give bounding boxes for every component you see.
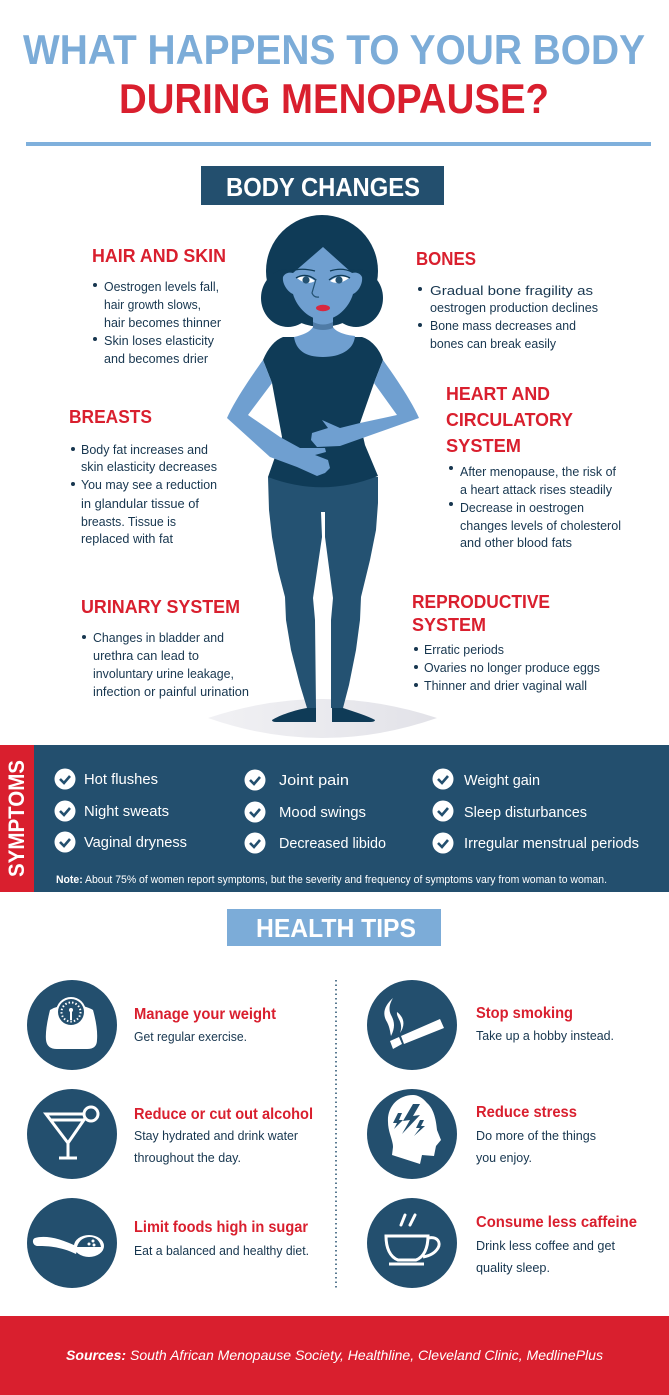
panel: hair and skin: and becomes drier	[104, 351, 209, 366]
legs	[268, 477, 378, 708]
panel: heart and circulatory system: Decrease in oestrogen	[460, 500, 584, 515]
tip: reduce stress: Do more of the things	[476, 1129, 596, 1143]
tip: manage your weight: Manage your weight	[134, 1006, 276, 1023]
panel: urinary system: Changes in bladder and	[93, 630, 224, 645]
tip: limit sugar	[27, 1198, 309, 1288]
panel: reproductive system	[412, 592, 600, 693]
mouth	[316, 305, 330, 311]
heading: health tips	[227, 909, 441, 946]
panel: urinary system	[81, 597, 249, 699]
panel: reproductive system: REPRODUCTIVE	[412, 592, 550, 612]
panel: urinary system: infection or painful urination	[93, 684, 249, 699]
icon: head with lightning	[367, 1089, 457, 1179]
panel: reproductive system: Thinner and drier vaginal wall	[424, 678, 587, 693]
title: DURING MENOPAUSE?	[119, 75, 549, 122]
icon: scale	[27, 980, 117, 1070]
face	[283, 247, 362, 320]
panel: breasts: You may see a reduction	[81, 477, 217, 492]
panel: breasts: breasts. Tissue is	[81, 514, 176, 529]
panel: hair and skin: hair growth slows,	[104, 297, 201, 312]
panel: urinary system: urethra can lead to	[93, 648, 199, 663]
hair	[261, 215, 383, 327]
symptom list	[84, 771, 639, 852]
icon: cigarette	[367, 980, 457, 1070]
panel: heart and circulatory system: changes levels of cholesterol	[460, 518, 621, 533]
shirt	[263, 337, 383, 487]
symptoms label: SYMPTOMS	[4, 760, 29, 877]
left arm	[227, 360, 330, 476]
panel: hair and skin	[92, 246, 226, 366]
tip: manage your weight	[27, 980, 276, 1070]
panel: bones: Gradual bone fragility as	[430, 283, 594, 298]
tip: reduce alcohol: Stay hydrated and drink water	[134, 1129, 298, 1143]
symptom list: Joint pain	[279, 772, 349, 789]
heading: body changes: BODY CHANGES	[226, 172, 420, 202]
panel: reproductive system: Erratic periods	[424, 642, 504, 657]
panel: breasts	[69, 407, 217, 546]
symptom list: Weight gain	[464, 772, 540, 789]
title	[23, 26, 645, 122]
icon: martini glass	[27, 1089, 117, 1179]
icon: coffee cup	[367, 1198, 457, 1288]
tip: less caffeine	[367, 1198, 637, 1288]
eyes	[289, 269, 352, 297]
panel: reproductive system: SYSTEM	[412, 615, 486, 635]
panel: symptoms	[0, 745, 669, 892]
tip: less caffeine: quality sleep.	[476, 1261, 550, 1275]
panel: heart and circulatory system: CIRCULATORY	[446, 410, 573, 430]
tip: reduce stress	[367, 1089, 596, 1179]
panel: hair and skin: Skin loses elasticity	[104, 333, 214, 348]
heading: body changes	[201, 166, 444, 205]
floor shadow	[208, 699, 437, 738]
panel: urinary system: URINARY SYSTEM	[81, 597, 240, 617]
panel: heart and circulatory system: HEART AND	[446, 384, 550, 404]
panel: breasts: in glandular tissue of	[81, 496, 199, 511]
figure: woman	[208, 215, 437, 738]
symptom list: Hot flushes	[84, 771, 158, 788]
panel: breasts: skin elasticity decreases	[81, 459, 217, 474]
note: Note: About 75% of women report symptoms, but the severity and frequency of symptoms vary from woman to woman.	[56, 874, 607, 886]
tip: reduce alcohol: Reduce or cut out alcohol	[134, 1106, 313, 1123]
panel: heart and circulatory system: and other blood fats	[460, 535, 572, 550]
check icons	[54, 768, 454, 854]
panel: bones: bones can break easily	[430, 336, 556, 351]
neck and chest	[294, 315, 355, 357]
tip: stop smoking: Stop smoking	[476, 1005, 573, 1022]
neck shadow	[313, 322, 333, 330]
symptom list: Mood swings	[279, 804, 366, 821]
tip: reduce alcohol	[27, 1089, 313, 1179]
tip: limit sugar: Eat a balanced and healthy diet.	[134, 1244, 309, 1258]
tip: less caffeine: Drink less coffee and get	[476, 1239, 616, 1253]
symptom list: Sleep disturbances	[464, 804, 587, 821]
icon: spoon of sugar	[27, 1198, 117, 1288]
tip: stop smoking: Take up a hobby instead.	[476, 1029, 614, 1043]
right arm	[311, 360, 419, 447]
tip: reduce stress: Reduce stress	[476, 1104, 577, 1121]
panel: hair and skin: hair becomes thinner	[104, 315, 222, 330]
symptom list: Irregular menstrual periods	[464, 835, 639, 852]
panel: heart and circulatory system	[446, 384, 621, 550]
footer: sources	[0, 1316, 669, 1395]
panel: bones: oestrogen production declines	[430, 300, 598, 315]
tip: stop smoking	[367, 980, 614, 1070]
feet	[272, 708, 375, 722]
panel: bones: BONES	[416, 249, 476, 269]
heading: health tips: HEALTH TIPS	[256, 913, 416, 943]
panel: heart and circulatory system: a heart attack rises steadily	[460, 482, 612, 497]
panel: heart and circulatory system: After menopause, the risk of	[460, 464, 616, 479]
panel: breasts: BREASTS	[69, 407, 152, 427]
tip: reduce stress: you enjoy.	[476, 1151, 532, 1165]
panel: heart and circulatory system: SYSTEM	[446, 436, 521, 456]
symptom list: Decreased libido	[279, 835, 386, 852]
symptom list: Night sweats	[84, 803, 169, 820]
tip: limit sugar: Limit foods high in sugar	[134, 1219, 308, 1236]
tip: reduce alcohol: throughout the day.	[134, 1151, 241, 1165]
symptom list: Vaginal dryness	[84, 834, 187, 851]
panel: urinary system: involuntary urine leakage,	[93, 666, 234, 681]
panel: reproductive system: Ovaries no longer produce eggs	[424, 660, 600, 675]
tip: manage your weight: Get regular exercise.	[134, 1030, 247, 1044]
panel: breasts: replaced with fat	[81, 531, 173, 546]
tip: less caffeine: Consume less caffeine	[476, 1214, 637, 1231]
panel: hair and skin: Oestrogen levels fall,	[104, 279, 219, 294]
panel: hair and skin: HAIR AND SKIN	[92, 246, 226, 266]
footer: sources: Sources: South African Menopause Society, Healthline, Cleveland Clinic, MedlinePlus	[66, 1347, 603, 1363]
panel: bones: Bone mass decreases and	[430, 318, 576, 333]
panel: bones	[416, 249, 598, 351]
panel: breasts: Body fat increases and	[81, 442, 208, 457]
